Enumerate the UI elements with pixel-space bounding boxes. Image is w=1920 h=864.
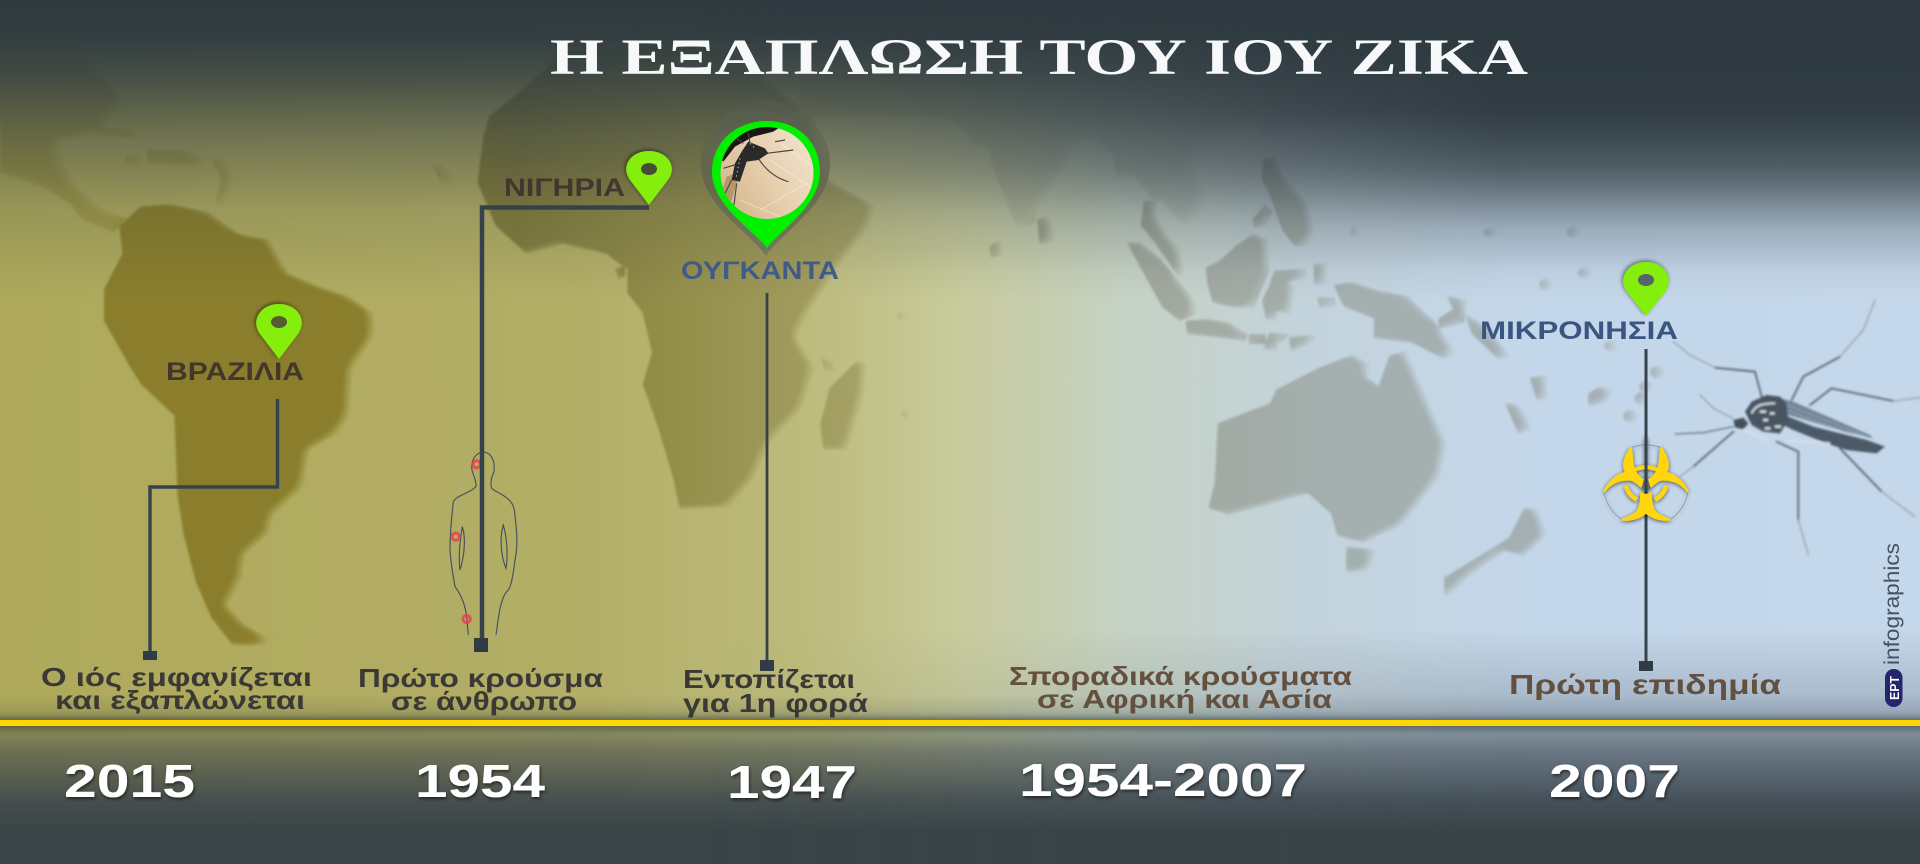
credit: ERT infographics: infographics <box>1881 543 1904 665</box>
pin: Nigeria <box>626 151 672 205</box>
background mosquito <box>1673 300 1920 555</box>
pin: Micronesia <box>1623 262 1669 316</box>
bottom dark band right <box>921 647 1920 784</box>
text: 1954 event <box>358 663 603 716</box>
icon: biohazard <box>1604 437 1688 520</box>
text: 1947 event: Εντοπίζεται <box>683 664 855 694</box>
top dark band right <box>816 41 1920 258</box>
text: 1947 event: για 1η φορά <box>683 688 868 718</box>
credit: ERT infographics: ΕΡΤ <box>1887 676 1902 700</box>
year 2007: 2007 <box>1549 755 1680 807</box>
pin: Uganda with mosquito photo <box>701 121 830 256</box>
label: Uganda: ΟΥΓΚΑΝΤΑ <box>681 257 839 285</box>
label: Nigeria: ΝΙΓΗΡΙΑ <box>504 174 625 202</box>
top dark band <box>0 0 1920 300</box>
text: 1954-2007 event: σε Αφρική και Ασία <box>1037 684 1332 714</box>
pin: Brazil <box>256 304 302 359</box>
text: 2015 event: Ο ιός εμφανίζεται <box>41 662 312 692</box>
title: Η ΕΞΑΠΛΩΣΗ ΤΟΥ ΙΟΥ ΖΙΚΑ <box>550 30 1528 86</box>
year 1954-2007: 1954-2007 <box>1019 754 1307 806</box>
connector: Nigeria to 1954 <box>474 208 649 652</box>
label: Micronesia: ΜΙΚΡΟΝΗΣΙΑ <box>1480 317 1678 345</box>
text: 1947 event <box>683 664 868 718</box>
connector: Uganda to 1947 <box>760 293 774 671</box>
world map landmasses <box>0 74 1664 646</box>
year 1947: 1947 <box>727 756 857 808</box>
label: Brazil: ΒΡΑΖΙΛΙΑ <box>166 358 304 386</box>
text: 1954 event: Πρώτο κρούσμα <box>358 663 603 693</box>
text: 1954 event: σε άνθρωπο <box>391 686 577 716</box>
year 1954: 1954 <box>415 755 546 807</box>
bottom dark band <box>0 695 1920 864</box>
text: 1954-2007 event: Σποραδικά κρούσματα <box>1009 661 1352 691</box>
text: 2015 event <box>41 662 312 715</box>
text: 2015 event: και εξαπλώνεται <box>55 685 305 715</box>
timeline bar <box>0 717 1920 730</box>
human body figure <box>450 452 517 635</box>
year 2015: 2015 <box>64 755 195 807</box>
connector: Brazil to 2015 <box>143 399 278 660</box>
connector: Micronesia to 2007 <box>1639 349 1653 671</box>
text: 2007 event: Πρώτη επιδημία <box>1509 669 1781 700</box>
credit: ERT infographics <box>1881 543 1904 707</box>
text: 1954-2007 event <box>1009 661 1352 714</box>
